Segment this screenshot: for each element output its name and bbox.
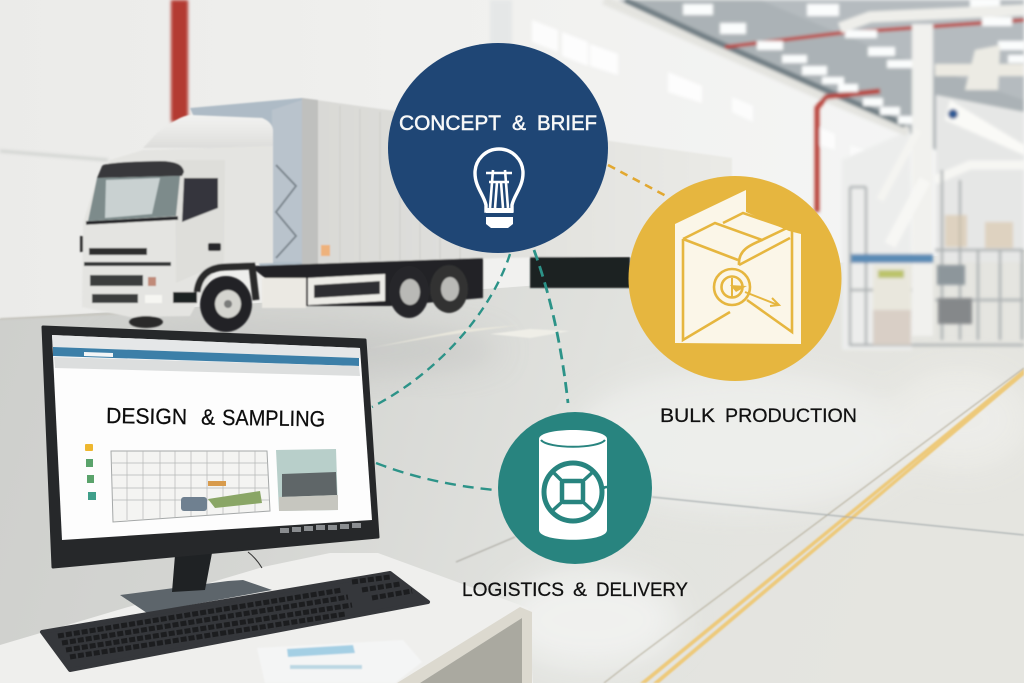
truck	[80, 98, 732, 332]
step circle: bulk production	[628, 176, 842, 381]
heading: concept and brief: &	[512, 112, 526, 135]
red column	[171, 0, 188, 122]
front wheel arch	[197, 266, 256, 300]
step circle: logistics and delivery	[498, 412, 652, 564]
icon: drum with wheel	[539, 430, 607, 540]
wall	[0, 0, 1024, 319]
front bumper lower	[173, 292, 197, 303]
cab body	[82, 146, 273, 317]
screen	[52, 335, 372, 540]
factory gantry and racking	[840, 10, 1024, 346]
side window	[182, 178, 218, 222]
floor highlights	[570, 370, 910, 510]
heading: concept and brief: CONCEPT	[399, 112, 501, 135]
screen image: building	[276, 449, 338, 511]
wall panels	[490, 0, 512, 100]
cab fairing	[143, 115, 273, 148]
ceiling lights	[683, 0, 1024, 124]
keyboard	[42, 573, 428, 670]
dashed connector: concept to logistics	[534, 250, 568, 403]
screen image: grid and truck	[111, 451, 270, 522]
front wheel	[200, 276, 252, 332]
label: logistics and delivery: LOGISTICS	[462, 580, 564, 601]
dashed connector: concept to design	[372, 254, 510, 407]
label: bulk production: BULK	[660, 405, 715, 427]
grille	[89, 248, 147, 255]
icon: light bulb	[475, 149, 523, 228]
ceiling	[618, 0, 1024, 205]
monitor	[43, 327, 378, 567]
taskbar icons	[280, 523, 361, 533]
desk	[0, 553, 533, 683]
label: logistics and delivery: &	[573, 580, 587, 601]
label: bulk production: PRODUCTION	[725, 405, 857, 427]
heading: design and sampling: &	[201, 405, 216, 430]
trailer	[190, 98, 732, 288]
label: logistics and delivery: DELIVERY	[596, 580, 688, 601]
windscreen	[88, 176, 180, 221]
monitor stand	[120, 552, 272, 613]
door handle	[208, 243, 221, 251]
floor seams and markings	[0, 313, 1024, 683]
icon: open box with target and arrow	[675, 190, 801, 344]
dashed connector: concept to production	[608, 165, 668, 197]
heading: design and sampling: SAMPLING	[222, 405, 325, 431]
rear wheels	[389, 265, 468, 318]
dashed connector: design to logistics	[376, 463, 495, 490]
chassis	[250, 258, 483, 306]
heading: concept and brief: BRIEF	[537, 112, 597, 135]
step circle: concept and brief	[388, 43, 608, 253]
screen side icons	[85, 444, 96, 500]
wall seam	[0, 151, 108, 160]
bright structure behind gantry	[936, 95, 1024, 262]
heading: design and sampling: DESIGN	[106, 403, 187, 429]
red ceiling pipes	[725, 20, 1024, 47]
printed sheet on desk	[257, 640, 422, 683]
roof edge beam	[604, 0, 908, 132]
sun visor	[97, 161, 184, 178]
